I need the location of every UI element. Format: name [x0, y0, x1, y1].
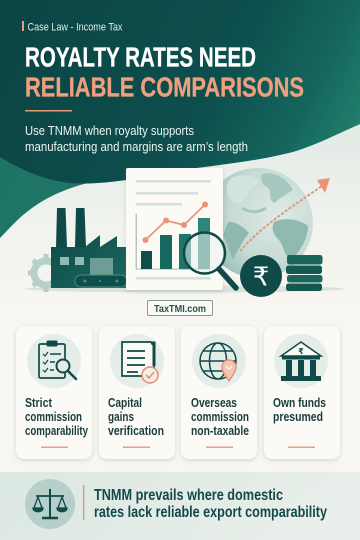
conclusion text: TNMM prevails where domestic [94, 487, 283, 504]
panel: conclusion banner [0, 472, 360, 540]
subtitle [25, 123, 248, 154]
card label [25, 396, 88, 438]
icon: globe [203, 168, 313, 278]
line chart [142, 202, 208, 243]
panel: report document [126, 168, 223, 290]
title rule [25, 110, 72, 112]
header background wave [0, 0, 360, 238]
panel: overseas commission non-taxable [181, 326, 257, 459]
icon: magnifying glass [184, 232, 236, 288]
icon: document with check badge [122, 342, 158, 383]
subtitle: manufacturing and margins are arm’s length [25, 139, 248, 154]
eyebrow label: Case Law - Income Tax [28, 22, 123, 34]
icon: bank with rupee: ₹ [298, 347, 304, 356]
icon: rupee coin: ₹ [253, 262, 269, 292]
card label [273, 396, 326, 424]
icon: gear [28, 254, 64, 292]
title: ROYALTY RATES NEED [25, 42, 256, 72]
icon: rupee coin [240, 255, 282, 297]
icon: factory [51, 208, 127, 288]
card label: presumed [273, 410, 323, 424]
card label [108, 396, 164, 438]
card label: Strict [25, 396, 53, 410]
arrow: rising dashed trend [240, 178, 330, 251]
panel: strict commission comparability [16, 326, 92, 459]
icon: coin stack [286, 255, 322, 291]
card label: Capital [108, 396, 142, 410]
panel: own funds presumed [264, 326, 340, 459]
card label: gains [108, 410, 134, 424]
source badge: TaxTMI.com [154, 303, 206, 315]
card label: comparability [25, 424, 88, 438]
card label: commission [25, 410, 82, 424]
icon: scales of justice [33, 489, 67, 518]
ground shadow [25, 286, 345, 292]
illustration backdrop [0, 110, 360, 320]
card label: non-taxable [191, 424, 249, 438]
icon: globe with location pin [200, 343, 236, 381]
bar chart [141, 218, 210, 269]
subtitle: Use TNMM when royalty supports [25, 123, 194, 138]
card label [191, 396, 249, 438]
card label: Own funds [273, 396, 326, 410]
conveyor belt [75, 275, 127, 287]
card label: commission [191, 410, 249, 424]
title [25, 42, 304, 102]
icon: clipboard with magnifier [39, 341, 76, 379]
card label: Overseas [191, 396, 237, 410]
panel: capital gains verification [99, 326, 175, 459]
conclusion text [94, 487, 327, 521]
card label: verification [108, 424, 164, 438]
